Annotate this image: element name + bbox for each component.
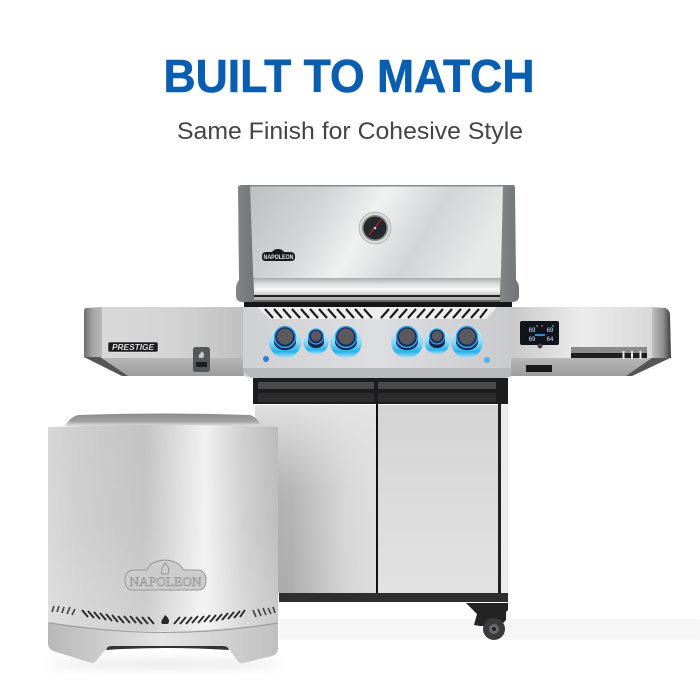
right door: [378, 405, 498, 593]
knob 1: [269, 326, 301, 358]
left door: [255, 405, 376, 593]
grill lid: [236, 185, 519, 307]
knob 2: [304, 329, 328, 354]
left side shelf: [84, 307, 244, 376]
lid left end cap: [236, 185, 254, 302]
control panel vents: [265, 309, 487, 318]
embossed Napoleon logo: [125, 560, 206, 590]
latch: [193, 347, 210, 372]
utility rail: [571, 347, 647, 359]
Napoleon logo badge: [262, 249, 295, 261]
knob 5: [424, 329, 450, 354]
digital thermometer display: 64: [547, 337, 554, 343]
prestige badge: PRESTIGE: [112, 343, 155, 352]
fire pit: [48, 414, 278, 663]
fire pit vents: [52, 606, 75, 615]
title: BUILT TO MATCH: [164, 50, 534, 102]
light button left: [263, 356, 269, 362]
fire pit lid rim: [65, 414, 261, 426]
light button right: [484, 357, 490, 363]
lid handle band: [248, 278, 506, 295]
caster wheel: [466, 603, 508, 640]
digital thermometer display: 69: [547, 328, 554, 334]
fire pit shadow: [47, 659, 283, 669]
knob 6: [451, 326, 483, 358]
shelf vent slot: [526, 365, 552, 372]
control panel: [243, 307, 511, 378]
Napoleon logo badge: NAPOLEON: [264, 255, 294, 261]
temperature gauge: [359, 212, 391, 244]
grill: [84, 185, 671, 640]
knob 3: [330, 326, 362, 358]
digital thermometer display: 69: [529, 337, 536, 343]
flame icon: [161, 615, 169, 624]
digital thermometer display: [520, 321, 559, 348]
floor shadow: [279, 619, 700, 640]
fire pit base with feet: [48, 618, 278, 663]
digital thermometer display: 69: [529, 328, 536, 334]
knob 4: [391, 326, 423, 358]
fire pit body: [48, 425, 278, 631]
embossed Napoleon logo: NAPOLEON: [130, 574, 202, 589]
right side shelf: [510, 307, 671, 376]
subtitle: Same Finish for Cohesive Style: [177, 118, 523, 145]
lid right end cap: [500, 185, 519, 302]
grill cabinet: [253, 378, 508, 602]
fire pit arch shadow: [106, 646, 229, 650]
